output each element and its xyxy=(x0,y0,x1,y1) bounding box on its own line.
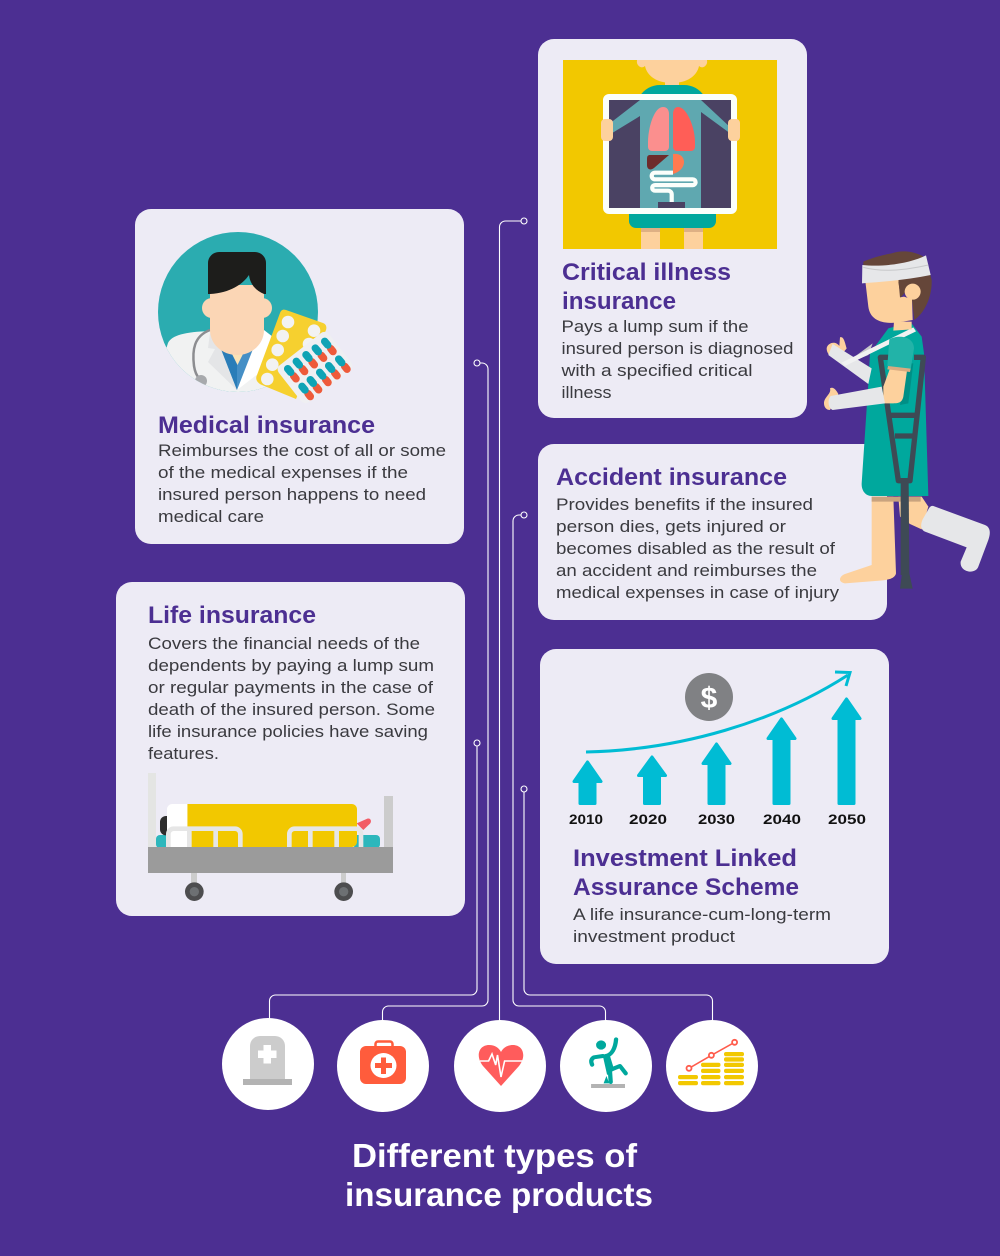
panel: accident insurance xyxy=(538,444,887,620)
heading: Critical illness xyxy=(562,259,731,286)
text block: dependents by paying a lump sum xyxy=(148,656,434,675)
text block: of the medical expenses if the xyxy=(158,463,408,482)
chart: rising arrows: 2030 xyxy=(698,811,735,827)
heading: Investment Linked xyxy=(573,845,797,872)
text block: medical expenses in case of injury xyxy=(556,583,840,602)
chart: rising arrows: 2020 xyxy=(629,811,667,827)
panel: medical insurance xyxy=(135,209,464,544)
heading: insurance xyxy=(562,288,676,315)
title: insurance products xyxy=(345,1176,653,1213)
icon: heart with pulse xyxy=(454,1020,546,1112)
heading: Medical insurance xyxy=(158,412,375,439)
icon: coins with growth chart xyxy=(666,1020,758,1112)
heading: Accident insurance xyxy=(556,464,787,491)
text block: illness xyxy=(562,383,612,402)
text block xyxy=(573,905,831,946)
text block: Reimburses the cost of all or some xyxy=(158,441,446,460)
text block: with a specified critical xyxy=(560,361,752,380)
heading: Life insurance xyxy=(148,602,316,629)
text block: an accident and reimburses the xyxy=(556,561,817,580)
chart: rising arrows: $ xyxy=(701,682,718,715)
text block: person dies, gets injured or xyxy=(556,517,786,536)
text block xyxy=(560,317,794,402)
text block: Provides benefits if the insured xyxy=(556,495,813,514)
chart: rising arrows: 2050 xyxy=(828,811,866,827)
text block xyxy=(158,441,446,526)
text block: features. xyxy=(148,744,219,763)
icon: person slipping xyxy=(560,1020,652,1112)
panel: critical illness insurance xyxy=(538,39,807,418)
panel: investment linked assurance scheme xyxy=(540,649,889,964)
text block: insured person is diagnosed xyxy=(562,339,794,358)
text block: Pays a lump sum if the xyxy=(562,317,748,336)
text block: Covers the financial needs of the xyxy=(148,634,420,653)
heading: Assurance Scheme xyxy=(573,874,799,901)
text block: A life insurance-cum-long-term xyxy=(573,905,831,924)
text block: investment product xyxy=(573,927,735,946)
chart: rising arrows xyxy=(569,672,866,827)
illustration: hospital bed xyxy=(148,773,393,901)
title xyxy=(345,1137,653,1213)
text block: insured person happens to need xyxy=(158,485,426,504)
panel: life insurance xyxy=(116,582,465,916)
text block xyxy=(148,634,435,763)
text block: medical care xyxy=(158,507,264,526)
illustration: injured patient on crutches xyxy=(824,251,990,589)
illustration: x-ray xyxy=(563,60,777,249)
chart: rising arrows: 2010 xyxy=(569,811,603,827)
text block: life insurance policies have saving xyxy=(148,722,428,741)
heading xyxy=(573,845,799,901)
title: Different types of xyxy=(352,1137,638,1174)
connector lines xyxy=(270,218,712,1022)
text block xyxy=(556,495,840,602)
icon: tombstone xyxy=(222,1018,314,1110)
text block: becomes disabled as the result of xyxy=(556,539,835,558)
text block: or regular payments in the case of xyxy=(148,678,433,697)
chart: rising arrows: 2040 xyxy=(763,811,801,827)
heading xyxy=(562,259,731,315)
illustration: doctor with pills xyxy=(150,232,352,403)
text block: death of the insured person. Some xyxy=(148,700,435,719)
icon: first aid kit xyxy=(337,1020,429,1112)
